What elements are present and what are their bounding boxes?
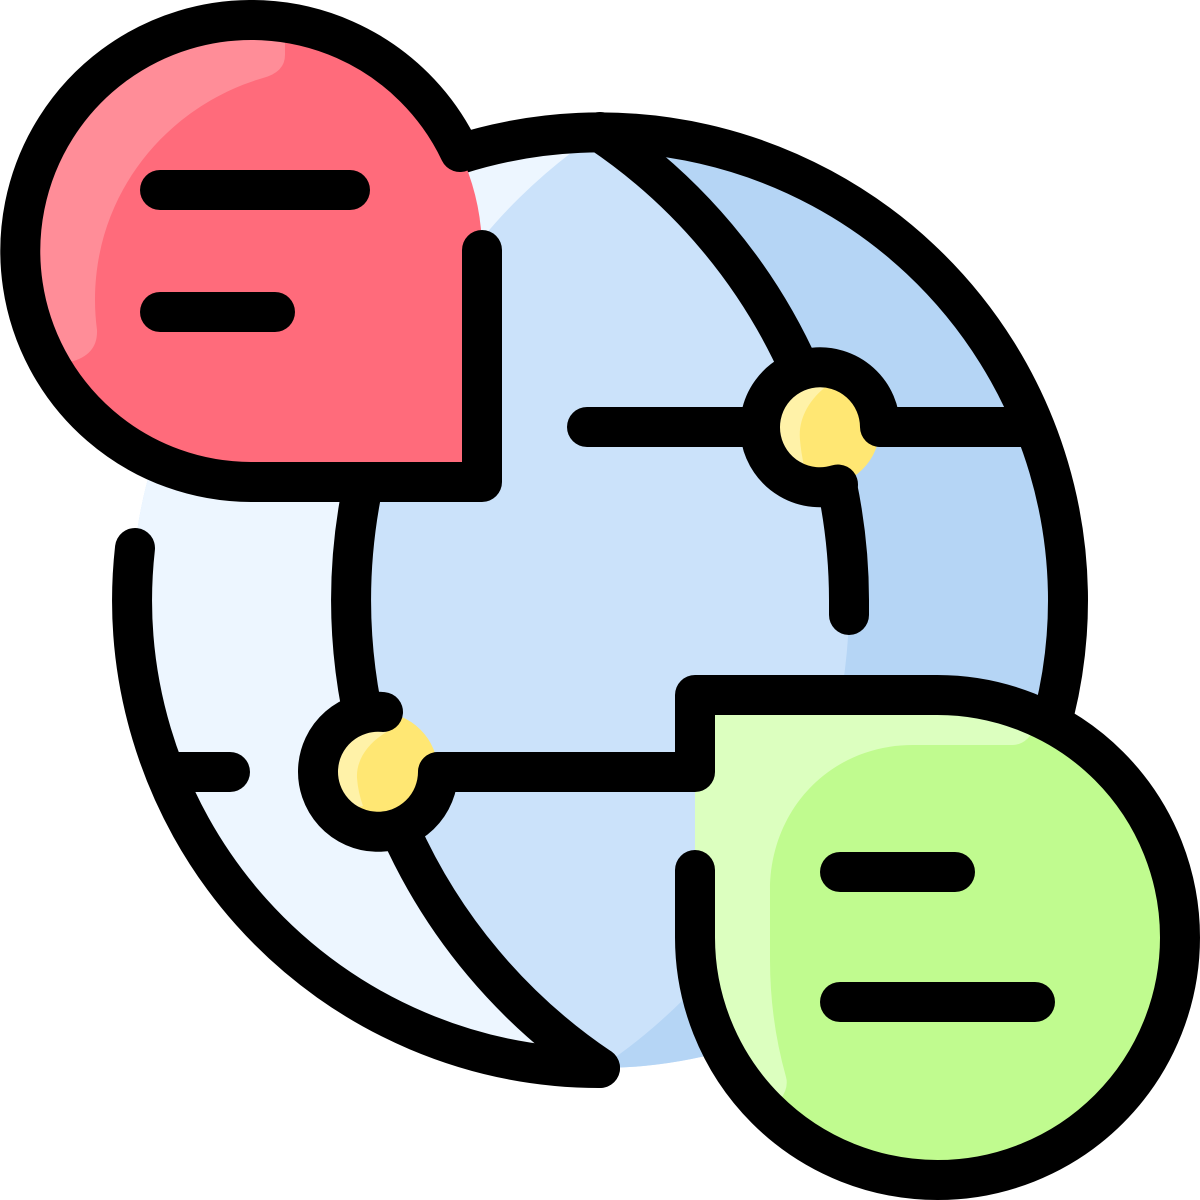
- speech bubble: red: [10, 10, 482, 482]
- green bubble text lines: [840, 872, 1035, 1002]
- red bubble highlight: [40, 40, 285, 362]
- globe outline and meridians: [132, 132, 1068, 1068]
- globe fill: [138, 152, 1048, 1068]
- red bubble text lines: [160, 190, 350, 312]
- red bubble outline: [20, 20, 482, 482]
- network node: upper right: [760, 367, 880, 487]
- speech bubble: green: [438, 695, 1180, 1180]
- green bubble outline: [438, 695, 1180, 1180]
- network node: lower left: [318, 712, 438, 832]
- green bubble highlight: [695, 695, 1036, 1100]
